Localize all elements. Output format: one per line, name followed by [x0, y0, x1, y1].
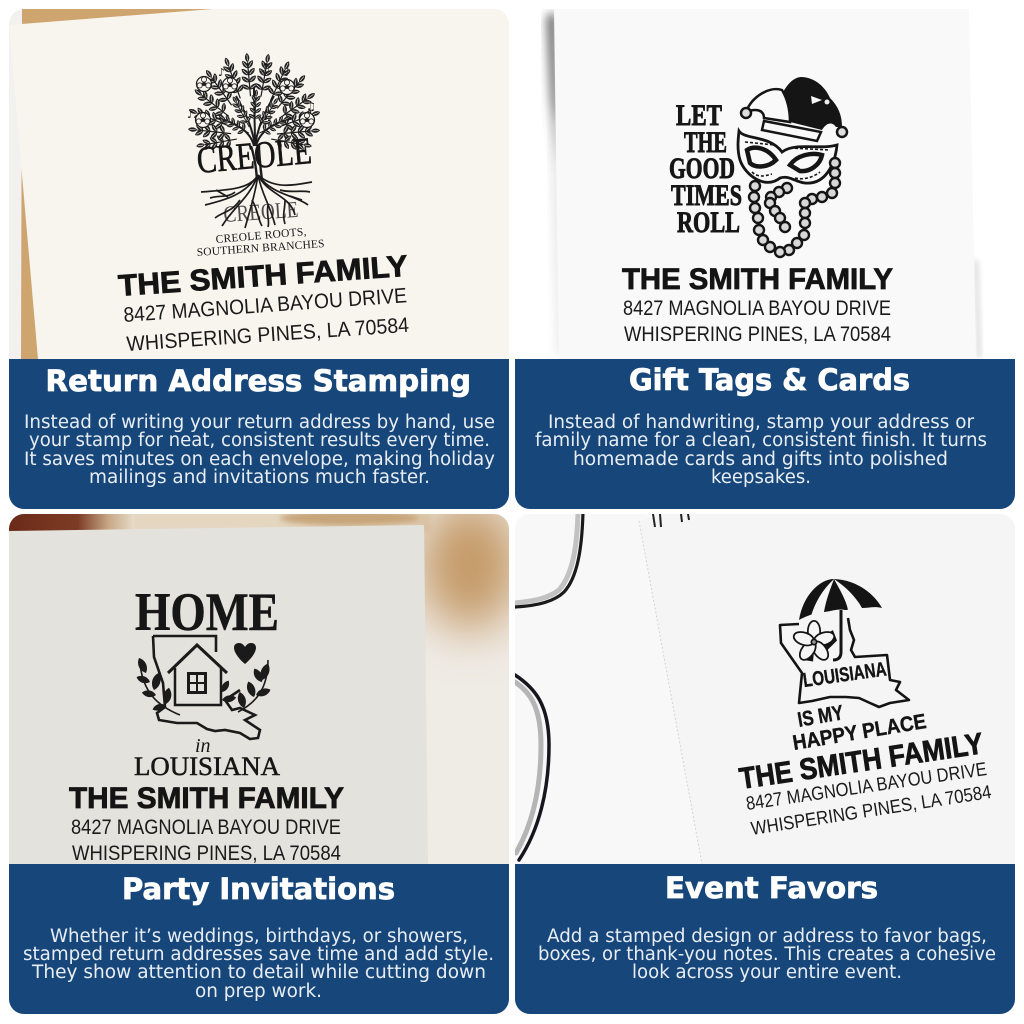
photo: notepad and glasses with louisiana stamp: [515, 512, 1015, 864]
body text: on prep work.: [195, 981, 322, 1002]
body text: stamped return addresses save time and add style.: [23, 944, 494, 965]
icon: louisiana house with laurels: [135, 636, 272, 739]
text: address line 1: 8427 MAGNOLIA BAYOU DRIVE: [71, 816, 341, 839]
photo: textured card with home stamp: [9, 500, 520, 865]
icon: jester hat: [741, 77, 847, 141]
text: address line 2: WHISPERING PINES, LA 70584: [126, 314, 410, 356]
icon: umbrella: [799, 579, 882, 660]
text: family name: THE SMITH FAMILY: [622, 263, 893, 296]
body text: family name for a clean, consistent finish. It turns: [535, 430, 987, 451]
panel: return address stamping: [9, 9, 509, 509]
text: let the good times roll: ROLL: [677, 206, 740, 239]
photo: stamped envelope with creole tree: [9, 9, 509, 359]
text: address line 1: 8427 MAGNOLIA BAYOU DRIVE: [123, 284, 408, 327]
panel: party invitations: [9, 500, 520, 1014]
heading: creole: CREOLE: [195, 130, 313, 182]
text: let the good times roll: [669, 99, 742, 239]
text: address line 2: WHISPERING PINES, LA 70584: [72, 842, 341, 865]
text: louisiana: LOUISIANA: [134, 752, 280, 781]
photo: white card with mardi gras stamp: [541, 9, 983, 358]
icon: creole tree stamp: [185, 52, 323, 228]
body text: Whether it’s weddings, birthdays, or showers,: [50, 926, 468, 947]
icon: creole tree stamp: ♪: [218, 66, 225, 79]
icon: creole tree stamp: ♪: [187, 108, 194, 121]
text: address line 1: 8427 MAGNOLIA BAYOU DRIVE: [745, 759, 988, 815]
icon: bead necklace: [749, 158, 840, 257]
body text: [538, 926, 996, 983]
icon: creole tree stamp: ♪: [284, 66, 291, 79]
body text: [535, 412, 987, 488]
text: happy place: HAPPY PLACE: [791, 710, 928, 755]
text: let the good times roll: THE: [684, 126, 727, 159]
icon: creole tree stamp: ♫: [306, 100, 316, 113]
text: family name: THE SMITH FAMILY: [69, 782, 344, 815]
icon: creole tree stamp: CREOLE: [223, 197, 299, 227]
heading: home: HOME: [135, 582, 279, 642]
caption panel: gift tags and cards: [515, 359, 1015, 509]
text: southern branches: SOUTHERN BRANCHES: [196, 238, 325, 259]
body text: your stamp for neat, consistent results every time.: [29, 430, 490, 451]
text: let the good times roll: TIMES: [671, 179, 742, 212]
icon: notepad spiral rings: [653, 514, 689, 527]
caption panel: party invitations: [9, 864, 509, 1014]
text: is my: IS MY: [796, 701, 845, 732]
body text: Add a stamped design or address to favor bags,: [547, 926, 987, 947]
panel: event favors: [515, 512, 1015, 1014]
body text: mailings and invitations much faster.: [89, 467, 430, 488]
body text: look across your entire event.: [632, 962, 902, 983]
icon: louisiana outline: [780, 618, 909, 707]
text: let the good times roll: GOOD: [669, 152, 735, 185]
caption panel: event favors: [515, 864, 1015, 1014]
body text: Instead of writing your return address by hand, use: [24, 412, 495, 433]
body text: Instead of handwriting, stamp your address or: [548, 412, 974, 433]
body text: [24, 412, 495, 488]
text: address line 2: WHISPERING PINES, LA 70584: [750, 782, 993, 840]
icon: glasses: [515, 512, 583, 860]
icon: magnolia flower: [792, 621, 836, 663]
text: let the good times roll: LET: [676, 99, 722, 132]
body text: [23, 926, 494, 1002]
heading: Party Invitations: [122, 872, 395, 906]
body text: They show attention to detail while cutting down: [31, 962, 486, 983]
heading: Gift Tags & Cards: [629, 363, 910, 397]
icon: mardi gras mask: [738, 131, 837, 183]
heading: Return Address Stamping: [46, 364, 471, 398]
text: louisiana: LOUISIANA: [802, 658, 888, 692]
body text: homemade cards and gifts into polished: [573, 449, 948, 470]
text: family name: THE SMITH FAMILY: [737, 727, 985, 796]
heading: Event Favors: [665, 871, 878, 905]
icon: creole tree stamp: ♫: [259, 61, 271, 76]
body text: boxes, or thank-you notes. This creates a cohesive: [538, 944, 996, 965]
text: family name: THE SMITH FAMILY: [117, 250, 409, 303]
text: address line 2: WHISPERING PINES, LA 70584: [624, 323, 891, 346]
text: creole roots: CREOLE ROOTS,: [215, 226, 307, 246]
icon: heart: [234, 643, 256, 664]
text: in: in: [195, 735, 211, 757]
body text: keepsakes.: [711, 467, 811, 488]
caption panel: return address stamping: [9, 359, 509, 509]
body text: It saves minutes on each envelope, making holiday: [24, 449, 495, 470]
icon: creole tree stamp: ♫: [262, 109, 273, 123]
panel: gift tags and cards: [515, 9, 1015, 509]
text: address line 1: 8427 MAGNOLIA BAYOU DRIVE: [623, 297, 891, 320]
